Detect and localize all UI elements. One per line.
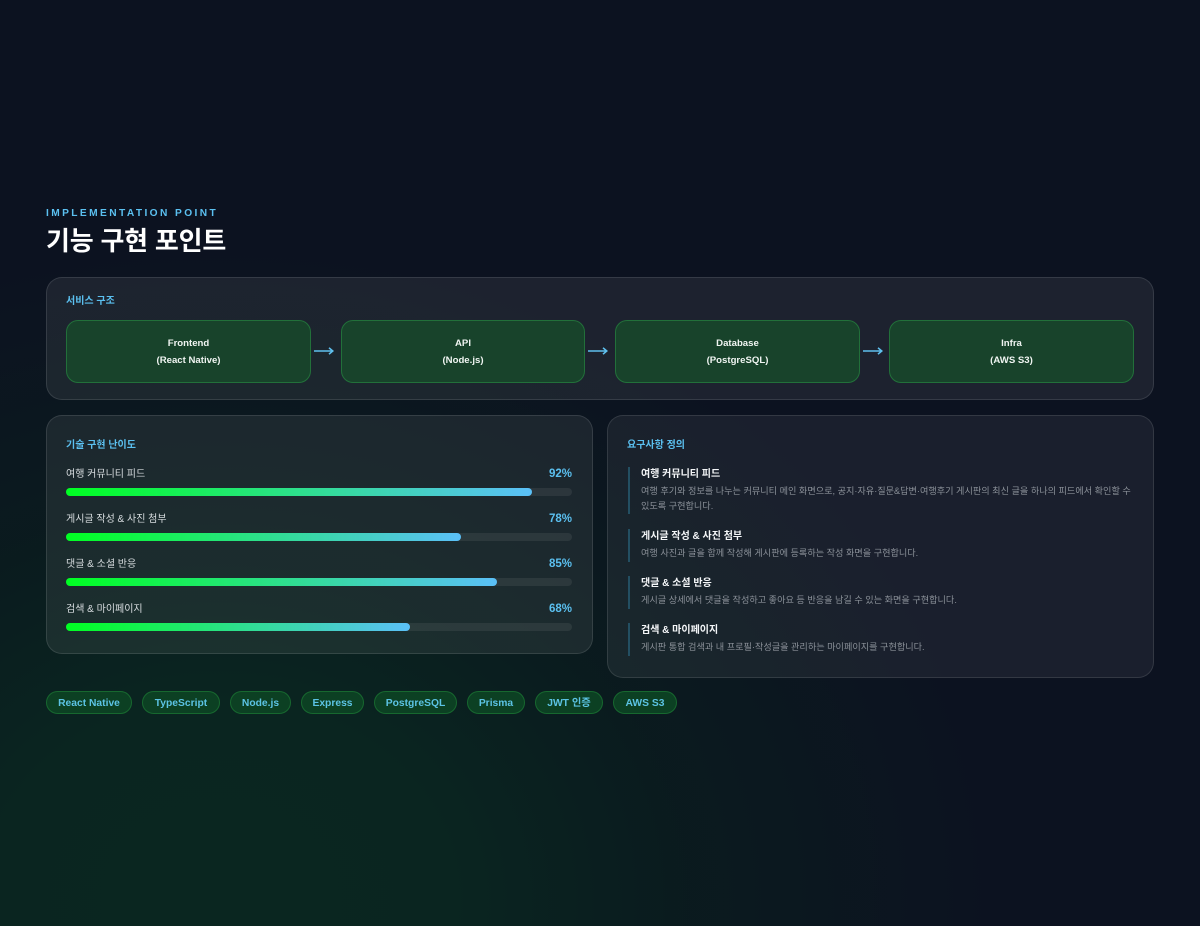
tag (142, 691, 220, 714)
node: api: API (455, 338, 471, 349)
node: infra (889, 320, 1134, 383)
node: database: Database (716, 338, 759, 349)
tag (467, 691, 525, 714)
tag: TypeScript (155, 698, 207, 709)
requirement: community feed (628, 467, 1134, 514)
panel: service architecture (46, 277, 1154, 400)
arrow (314, 347, 334, 355)
bar: community feed (66, 468, 572, 496)
node: database (615, 320, 860, 383)
panel: requirements (607, 415, 1154, 678)
requirement: search: 검색 & 마이페이지 (641, 625, 718, 636)
tag (230, 691, 291, 714)
bar: post writing (66, 513, 572, 541)
requirement: comments: 게시글 상세에서 댓글을 작성하고 좋아요 등 반응을 남길 수 있는 화면을 구현합니다. (641, 595, 957, 605)
bar: post writing: 78% (549, 513, 572, 525)
bar: search (66, 603, 572, 631)
tag: Express (312, 698, 353, 709)
tag: PostgreSQL (386, 698, 445, 709)
panel: implementation difficulty (46, 415, 593, 654)
bar: post writing: 게시글 작성 & 사진 첨부 (66, 514, 167, 525)
tag (374, 691, 457, 714)
requirement: comments: 댓글 & 소셜 반응 (641, 578, 712, 589)
tag: React Native (58, 698, 120, 709)
node: database: (PostgreSQL) (707, 355, 768, 366)
arrow (863, 347, 883, 355)
requirement: community feed: 여행 커뮤니티 피드 (641, 469, 720, 480)
panel heading: 기술 구현 난이도 (66, 440, 136, 451)
bar: comments: 85% (549, 558, 572, 570)
node: frontend (66, 320, 311, 383)
arrow (588, 347, 608, 355)
requirement: search: 게시판 통합 검색과 내 프로필·작성글을 관리하는 마이페이지를 구현합니다. (641, 642, 925, 652)
bar: comments (66, 558, 572, 586)
panel heading: 서비스 구조 (66, 296, 115, 307)
requirement: post writing: 게시글 작성 & 사진 첨부 (641, 531, 742, 542)
tag: Node.js (242, 698, 279, 709)
tag: JWT 인증 (547, 698, 591, 709)
tag (301, 691, 364, 714)
panel heading: 요구사항 정의 (627, 440, 685, 451)
node: infra: Infra (1001, 338, 1022, 349)
eyebrow heading: IMPLEMENTATION POINT (46, 208, 218, 219)
requirement: post writing (628, 529, 1134, 562)
bar: search: 68% (549, 603, 572, 615)
bar: search: 검색 & 마이페이지 (66, 604, 143, 615)
requirement: community feed: 여행 후기와 정보를 나누는 커뮤니티 메인 화면으로, 공지·자유·질문&답변·여행후기 게시판의 최신 글을 하나의 피드에서 확인할 수 있도록 구현합니다. (641, 486, 1131, 511)
requirement: comments (628, 576, 1134, 609)
requirement: post writing: 여행 사진과 글을 함께 작성해 게시판에 등록하는 작성 화면을 구현합니다. (641, 548, 918, 558)
tag (535, 691, 603, 714)
node: frontend: Frontend (168, 338, 209, 349)
node: api (341, 320, 585, 383)
node: frontend: (React Native) (156, 355, 220, 366)
title: 기능 구현 포인트 (46, 226, 226, 256)
node: api: (Node.js) (442, 355, 484, 366)
tag (613, 691, 677, 714)
tag: AWS S3 (626, 698, 664, 709)
node: infra: (AWS S3) (990, 355, 1033, 366)
requirement: search (628, 623, 1134, 656)
bar: comments: 댓글 & 소셜 반응 (66, 559, 136, 570)
bar: community feed: 92% (549, 468, 572, 480)
tag (46, 691, 132, 714)
tag: Prisma (479, 698, 513, 709)
bar: community feed: 여행 커뮤니티 피드 (66, 469, 145, 480)
